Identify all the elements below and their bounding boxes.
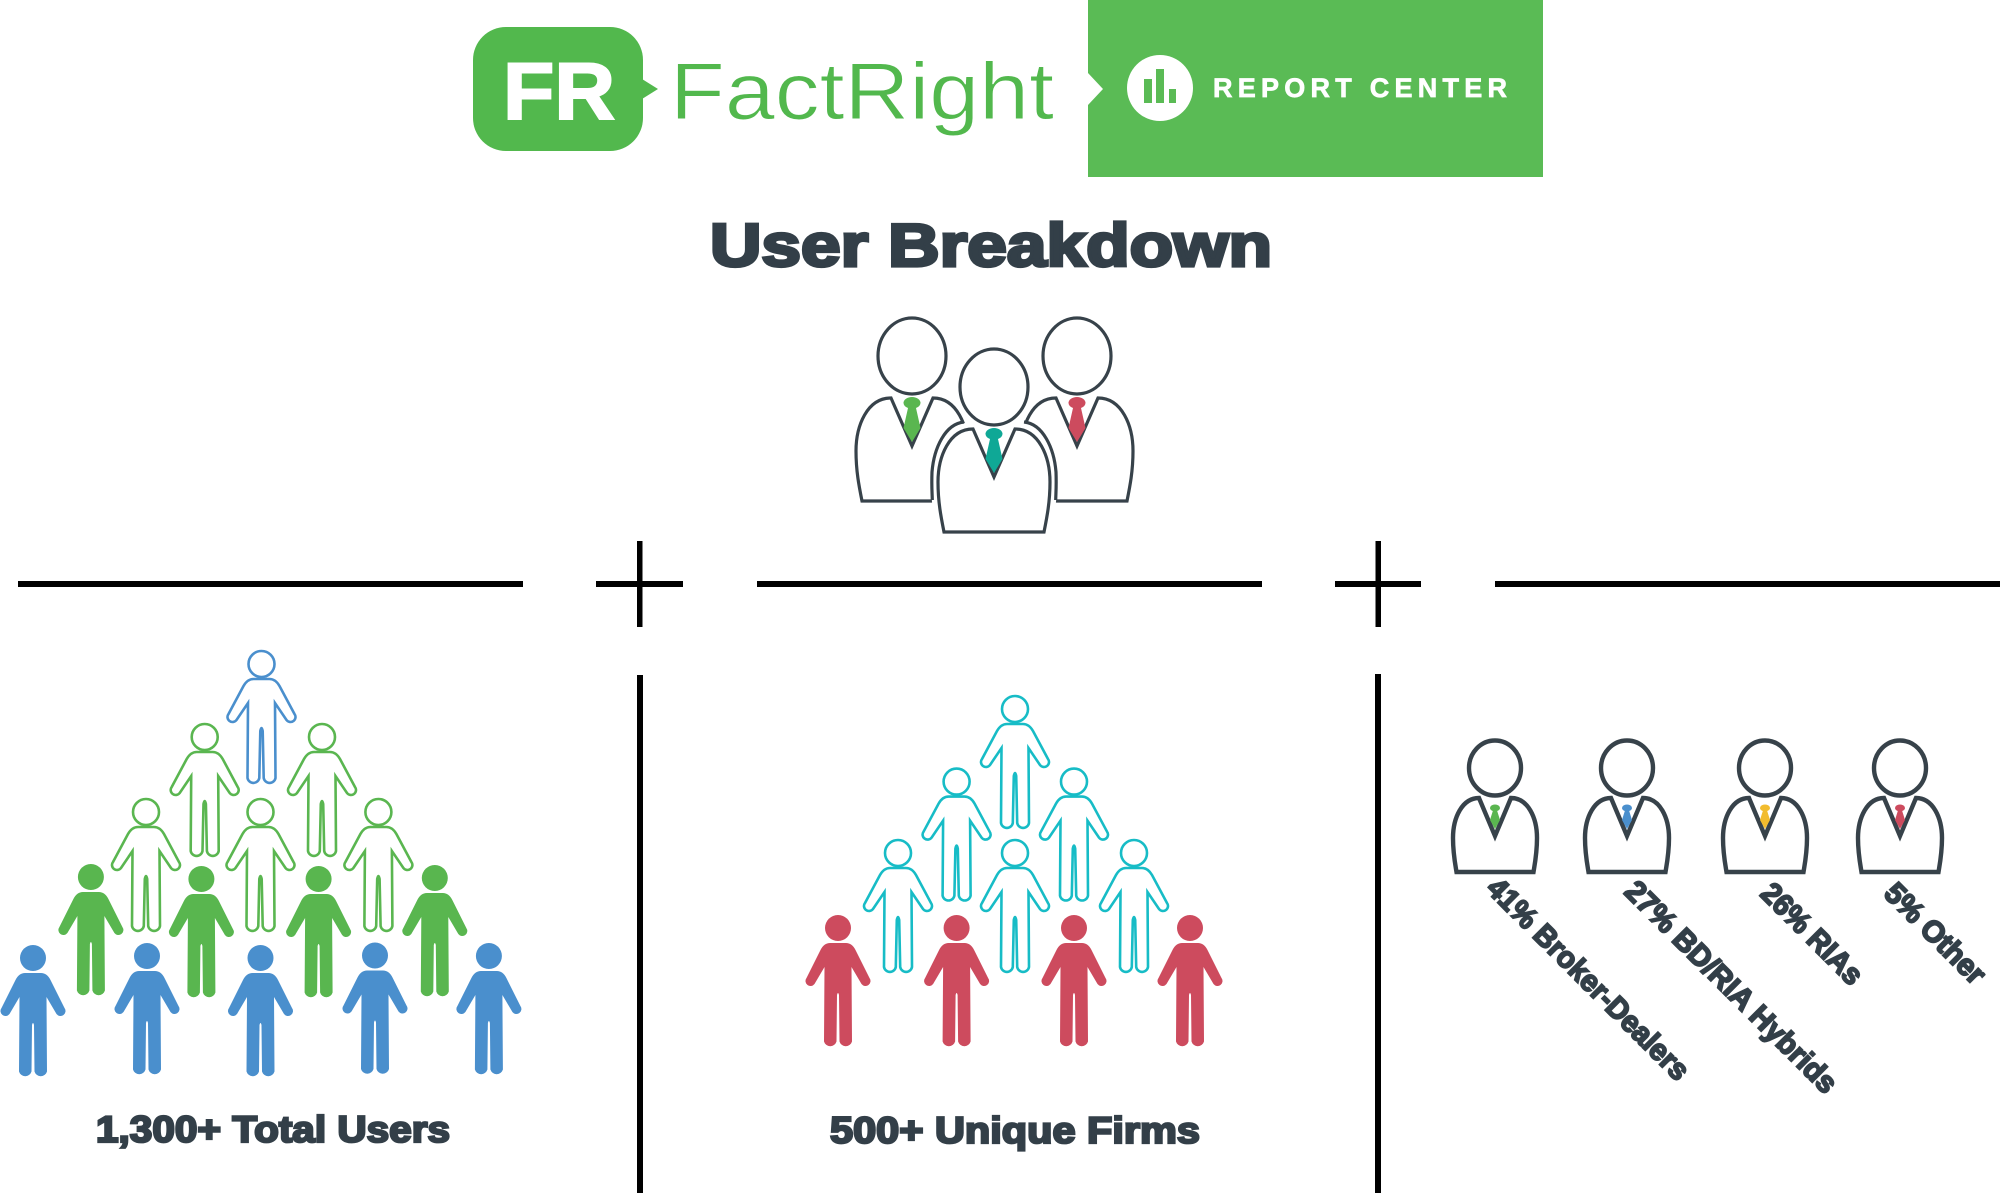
icon: FR speech bubble <box>473 27 658 151</box>
banner label: REPORT CENTER <box>1213 73 1507 103</box>
person: green tie <box>856 318 968 501</box>
people pyramid: users <box>0 651 521 1076</box>
label: 26% RIAs: 26% RIAs <box>1754 877 1869 992</box>
label: unique firms: 500+ Unique Firms <box>830 1110 1200 1151</box>
icon: other person <box>1858 740 1942 872</box>
label: 5% other: 5% Other <box>1878 877 1992 991</box>
label: total users: 1,300+ Total Users <box>96 1109 450 1150</box>
person: teal tie <box>938 349 1050 532</box>
people pyramid: firms <box>806 696 1222 1046</box>
icon: bar chart circle <box>1127 55 1193 121</box>
panel: unique firms <box>806 696 1222 1151</box>
label: 41% broker-dealers: 41% Broker-Dealers <box>1480 872 1696 1087</box>
person: red tie <box>1021 318 1133 501</box>
divider cross lines <box>18 541 2000 1193</box>
panel: total users <box>0 651 521 1150</box>
logo: FactRight <box>473 27 1054 151</box>
icon: broker-dealers person <box>1453 740 1537 872</box>
panel: firm type breakdown <box>1453 740 1992 1100</box>
halo edge lines around centre person <box>932 422 1056 500</box>
label: 27% BD/RIA hybrids: 27% BD/RIA Hybrids <box>1618 875 1844 1100</box>
icon: RIAs person <box>1723 740 1807 872</box>
banner: report center <box>1088 0 1543 177</box>
icon: FR speech bubble: FR <box>503 47 615 137</box>
title: User Breakdown <box>710 212 1272 279</box>
icon: three business people <box>856 318 1133 532</box>
icon: hybrids person <box>1585 740 1669 872</box>
logo wordmark: FactRight <box>670 47 1054 137</box>
